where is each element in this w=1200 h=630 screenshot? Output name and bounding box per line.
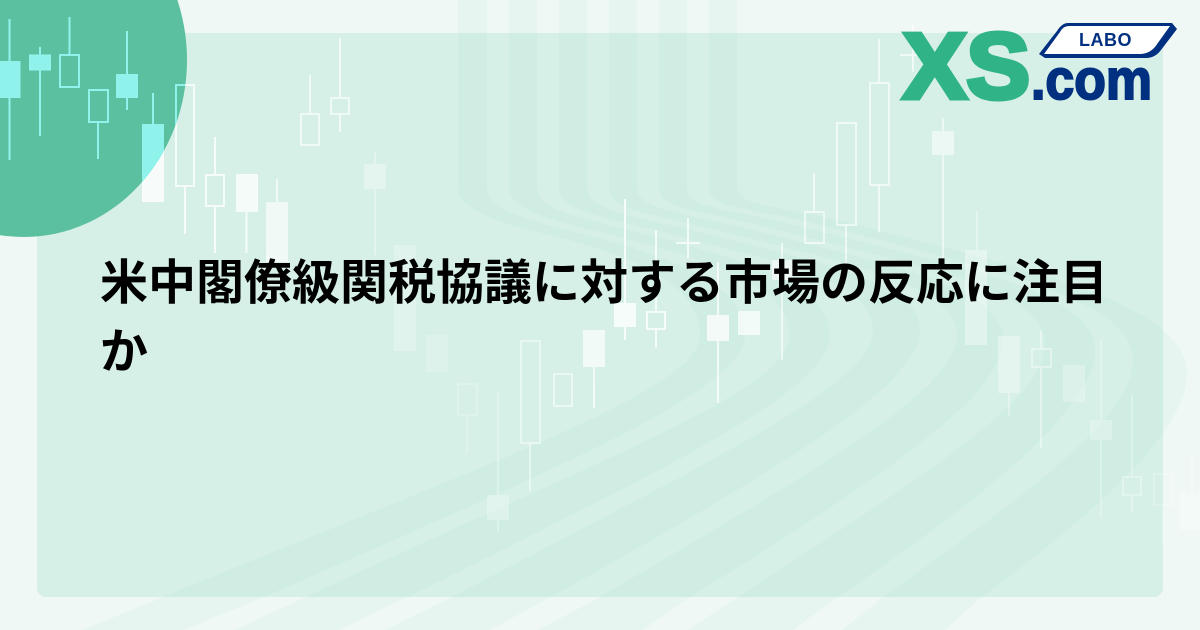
candlestick chart <box>142 25 1200 543</box>
title <box>100 257 1108 379</box>
XS.com LABO logo <box>903 14 1177 118</box>
corner circle <box>0 0 187 237</box>
logo wordmark .com: .com <box>1031 48 1152 112</box>
title: か <box>100 326 148 379</box>
cyan candlesticks inside circle <box>0 17 186 182</box>
logo LABO badge: LABO <box>1079 30 1132 50</box>
title: 米中閣僚級関税協議に対する市場の反応に注目 <box>100 257 1108 310</box>
logo LABO badge <box>1039 23 1177 58</box>
logo wordmark XS: XS <box>903 14 1030 118</box>
